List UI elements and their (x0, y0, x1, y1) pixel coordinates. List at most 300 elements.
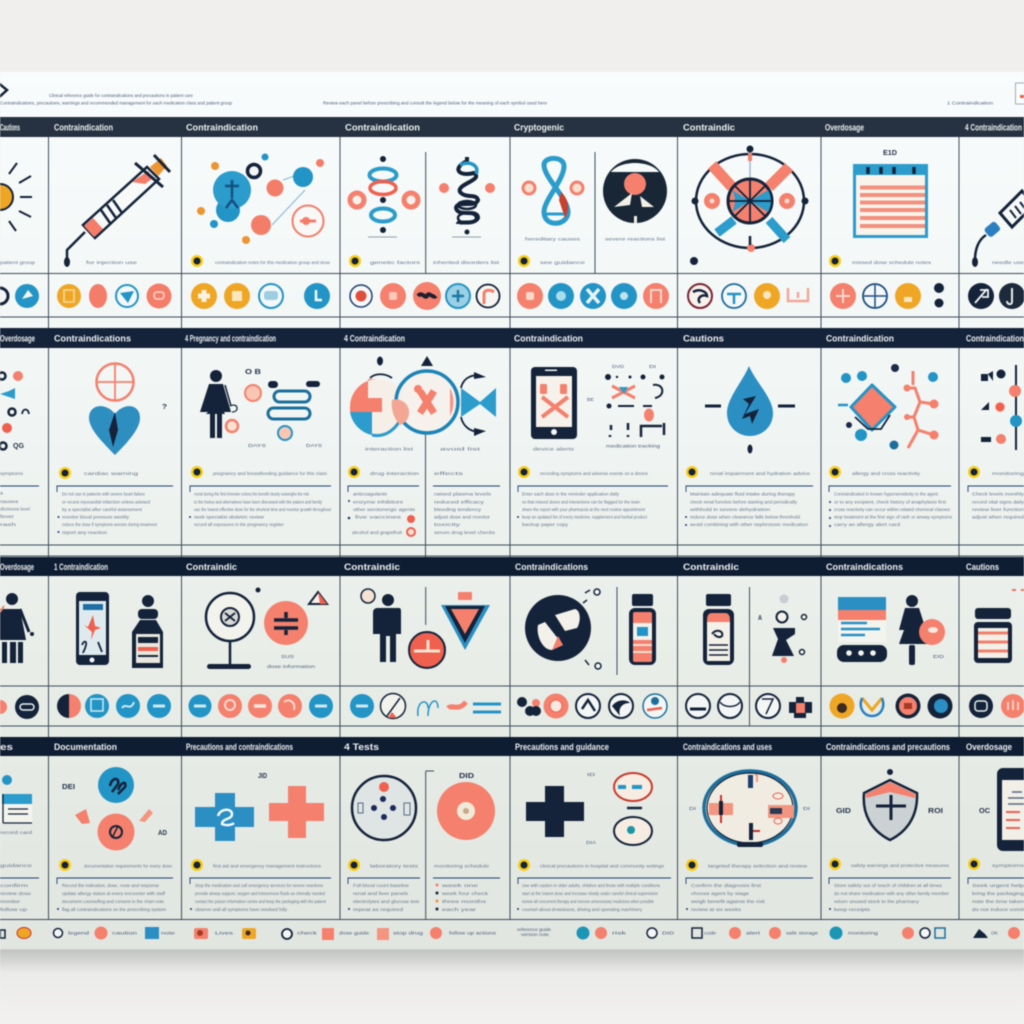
text block: bring the packaging (972, 891, 1024, 896)
icon: contraindication grid: DVD (612, 364, 625, 369)
text block (686, 878, 813, 912)
icon: oval target: DI (689, 806, 696, 811)
icon: tablet: OC (979, 808, 990, 815)
text block left (348, 878, 420, 912)
text block: update allergy status at every encounter with staff (62, 891, 166, 896)
bullet and caption: see guidance (540, 260, 586, 265)
row 4 panel: shield (826, 742, 951, 912)
row 4 panel: shield: Contraindications and precautions (826, 742, 950, 753)
row 3 panel: no pill (515, 562, 667, 718)
icon: bottle and person (132, 595, 163, 668)
text block: keep receipts (834, 907, 871, 912)
icon: navy cross and ovals: DIA (586, 840, 596, 845)
icon: overlapping circles (350, 356, 496, 436)
icon: shield: GID (836, 808, 851, 815)
footer legend: code (704, 930, 717, 936)
icon: ribbon figure (523, 158, 583, 223)
icon row (191, 283, 330, 309)
top header strip (0, 82, 1024, 106)
text block: adjust when required (972, 514, 1024, 520)
icon: chain links: DAYS (248, 443, 266, 448)
icon: medicine bottle (629, 594, 656, 665)
icon: phone (531, 367, 577, 439)
row 1 panel: syringe: for injection use (86, 260, 138, 265)
text block left: Full blood count baseline (353, 883, 410, 888)
text block: or to any excipient, check history of anaphylaxis first (834, 500, 947, 504)
text block: Contraindicated in known hypersensitivity to the agent (834, 492, 939, 496)
text block: cross reactivity can occur within related chemical classes (834, 507, 951, 512)
icon: helix left (350, 156, 418, 237)
row 4 panel: card: record card (0, 830, 33, 835)
text block: keep an updated list of every medicine, supplement and herbal product (522, 514, 648, 520)
top header strip: Contraindications, precautions, warnings and recommended management for each medication class and patient group (0, 100, 232, 106)
text block: a (0, 490, 4, 496)
footer legend: dose guide (339, 930, 370, 936)
row 4 panel: card: guidance (0, 863, 33, 868)
footer legend: caution (112, 930, 138, 936)
row 4 panel: crosses (186, 742, 331, 912)
text block: document counselling and consent in the chart note (62, 899, 164, 904)
bullet and caption (59, 859, 173, 871)
row 4 panel: blue and coral discs (54, 742, 173, 912)
row 3 panel: man and triangle: Contraindic (344, 562, 400, 573)
icon: chain links: O B (245, 369, 261, 376)
icon: molecule cluster (197, 154, 324, 244)
bullet and caption: documentation requirements for every dose (84, 864, 173, 868)
bullet and caption (349, 255, 500, 267)
icon row (830, 283, 944, 309)
row 2 panel: overlap: interaction list (365, 446, 414, 452)
footer legend: check (297, 930, 318, 936)
text block: Do not use in patients with severe heart failure (62, 492, 145, 496)
row 4 panel: card (0, 742, 39, 912)
text block (189, 486, 332, 527)
row 2 panel: phone: device alerts (533, 446, 575, 452)
row 4 panel: dial and disc: 4 Tests (344, 742, 379, 753)
text block: stop treatment at the first sign of rash or airway symptoms (834, 514, 953, 520)
icon: oval target (689, 771, 810, 847)
bullet and caption (518, 466, 649, 478)
row 3 panel: phone and bottle (54, 562, 171, 718)
icon: blue syringe (972, 191, 1024, 267)
text block: fever (0, 514, 15, 519)
row 1 panel: calendar (825, 122, 944, 309)
text block: nausea (0, 499, 19, 504)
footer legend (0, 926, 1020, 940)
icon row (830, 694, 952, 718)
text block right: raised plasma levels (434, 492, 492, 496)
row 1 panel: syringe (54, 122, 172, 308)
icon: label bottle (703, 594, 734, 665)
text block left (348, 486, 419, 536)
text block: so that missed doses and interactions can be flagged for the team (522, 500, 640, 504)
footer legend: reference guide (517, 927, 552, 932)
bullet and caption (518, 859, 665, 871)
row 4 panel: oval target: Contraindications and uses (683, 742, 772, 753)
icon: contraindication grid: BE (587, 397, 594, 402)
icon row (57, 694, 171, 718)
icon: dark disc (603, 159, 667, 224)
footer legend: DID (662, 930, 675, 936)
row 3 panel: ring stand: Contraindic (186, 562, 237, 573)
bullet and caption: laboratory tests (370, 864, 419, 868)
bullet and caption (191, 466, 328, 478)
text block: return unused stock to the pharmacy (834, 899, 920, 904)
row 4 panel: oval target (683, 742, 813, 912)
row 4 panel: tablet: Overdosage (966, 742, 1012, 753)
row 2 panel: phone (514, 334, 668, 527)
text block: Confirm the diagnosis first (691, 883, 762, 888)
text block right (433, 878, 500, 912)
row 1 panel: sun (0, 122, 39, 308)
icon: target and heart (89, 364, 167, 455)
text block: review all concurrent therapy and remove unnecessary medicines when possible (522, 899, 654, 904)
row 1 panel: sun: patient group (0, 260, 36, 265)
footer legend: legend (68, 930, 90, 936)
row 3 panel: bottle and figure: Contraindic (683, 562, 739, 573)
text block right: reduced efficacy (434, 500, 485, 504)
icon: syringe (64, 155, 170, 267)
row 2 panel: markers (0, 334, 39, 527)
row 4 panel: dial and disc (344, 742, 500, 912)
text block (968, 878, 1024, 912)
text block: record vital signs daily (972, 500, 1024, 504)
text block: Enter each dose in the reminder application daily (522, 492, 620, 496)
bullet and caption: genetic factors (370, 260, 421, 265)
bullet and caption: monitoring (992, 471, 1024, 476)
row 3 panel: jar: Cautions (966, 562, 999, 573)
icon: chain links (245, 369, 322, 448)
icon: phone (76, 592, 109, 665)
text block: start at the lowest dose and increase slowly under careful clinical supervision (522, 891, 658, 896)
icon: blue and coral crosses: JID (258, 773, 267, 780)
text block: or recent myocardial infarction unless advised (62, 500, 150, 504)
footer legend: Lives (215, 930, 234, 936)
text block (829, 878, 951, 912)
icon: blue and coral crosses (195, 773, 324, 841)
footer legend: risk (612, 930, 627, 936)
icon: paired discs: DEI (62, 784, 75, 791)
icon: dial (352, 776, 416, 840)
text block left: renal and liver panels (353, 891, 409, 896)
row 2 panel: overlap: avoid list (440, 446, 482, 452)
text block left: repeat as required (353, 907, 404, 912)
text block: check renal function before starting and periodically (690, 500, 798, 504)
icon: prohibited pill (525, 589, 601, 669)
text block: record all exposures in the pregnancy register (194, 522, 284, 527)
icon: coral disc and triangle (409, 592, 490, 668)
icon: helix right (439, 157, 495, 237)
text block right (433, 486, 500, 535)
row 1 panel: figure eight (514, 122, 669, 309)
top header strip: 1 Contraindication (947, 100, 994, 106)
text block (517, 878, 671, 912)
bullet and caption: safety warnings and protective measures (851, 863, 950, 868)
row 1 panel: calendar: Overdosage (825, 122, 864, 134)
footer legend: stop drug (393, 930, 424, 936)
bullet and caption: monitoring schedule (434, 864, 490, 868)
text block: backup paper copy (522, 522, 569, 527)
text block: Maintain adequate fluid intake during therapy (690, 492, 796, 496)
bullet and caption (968, 466, 1024, 478)
row 2 panel: pregnancy: 4 Pregnancy and contraindication (185, 334, 276, 344)
row 1 panel: figure eight: Cryptogenic (514, 122, 564, 134)
bullet and caption: missed dose schedule notes (852, 260, 932, 265)
icon: navy cross and ovals (526, 772, 652, 845)
text block (0, 486, 39, 527)
footer legend: note (161, 930, 176, 936)
row 1 panel: calendar: E1D (883, 150, 897, 157)
icon row (350, 282, 500, 310)
bullet and caption (191, 859, 322, 871)
text block: review dose (0, 891, 32, 896)
icon: scale markers (981, 365, 1022, 450)
footer legend: follow up actions (449, 930, 497, 936)
bullet and caption: targeted therapy selection and review (708, 864, 808, 868)
row 1 panel: wheel (683, 122, 808, 309)
bullet and caption (968, 858, 1024, 870)
bullet and caption (686, 859, 808, 871)
row 2 panel: pregnancy (185, 334, 332, 527)
bullet and caption: drug interaction (370, 471, 420, 476)
row 1 panel: wheel: Contraindic (683, 122, 735, 134)
text block: flag all contraindications on the prescribing system (62, 907, 166, 912)
text block: contact the poison information centre and keep the packaging with the patient (195, 899, 327, 904)
bullet and caption (348, 466, 465, 478)
row 2 panel: water drop (683, 334, 813, 527)
row 3 panel: bottle and figure (683, 562, 812, 718)
row 1 panel: sun: Cautions (0, 122, 20, 134)
row 2 panel: molecule diamond (826, 334, 953, 527)
icon: water drop (705, 366, 795, 454)
footer legend: OK (991, 930, 998, 936)
bullet and caption: contraindication notes for this medication group and dose (215, 260, 330, 265)
row 2 panel: markers: symptoms (0, 471, 24, 476)
row 2 panel: heart (54, 334, 173, 535)
row 1 panel: syringe right: needle use (992, 260, 1024, 265)
text block: rash (0, 522, 17, 527)
row 1 panel: syringe: Contraindication (54, 122, 113, 134)
row 4 panel: blue and coral discs: Documentation (54, 742, 117, 753)
row 3 panel: ring stand (186, 562, 333, 718)
text block left: enzyme inhibitors (353, 500, 404, 504)
text block right: adjust dose and monitor (434, 514, 491, 520)
text block: withhold in severe dehydration (690, 507, 771, 512)
text block: monitor (0, 899, 21, 904)
row 2 panel: heart: Contraindications (54, 334, 131, 344)
footer legend: alert (746, 930, 761, 936)
row 2 panel: molecule diamond: Contraindication (826, 334, 894, 344)
text block: provide airway support, oxygen and intravenous fluids as clinically needed (195, 891, 325, 896)
row 3 panel: no pill: Contraindications (515, 562, 588, 573)
icon: coral division disc: SUS (281, 654, 294, 659)
icon: record card (0, 775, 32, 823)
bullet and caption (59, 467, 139, 479)
top header strip: Review each panel before prescribing and consult the legend below for the meaning of each symbol used here (323, 100, 548, 106)
text block left: other serotonergic agents (353, 507, 416, 512)
icon row (188, 694, 333, 718)
icon: chain links: DAYS (306, 443, 322, 448)
icon: woman with coral disc (899, 595, 945, 665)
text block: report any reaction (62, 530, 108, 535)
text block: choose agent by stage (691, 891, 750, 896)
icon: ring on stand (206, 588, 260, 669)
row 4 panel: tablet (966, 742, 1024, 912)
icon row (517, 694, 667, 718)
bullet and caption: clinical precautions in hospital and community settings (540, 864, 665, 868)
row 1 panel: molecules: Contraindication (186, 122, 258, 134)
text block: follow up (0, 907, 28, 912)
text block (190, 878, 331, 912)
text block: weigh benefit against the risk (691, 899, 766, 904)
text block: counsel about drowsiness, driving and operating machinery (522, 907, 643, 912)
row 2 panel: markers: Overdosage (0, 334, 35, 344)
text block (57, 878, 173, 912)
icon: paired discs: AD (158, 830, 167, 837)
row 3 panel: device and woman (826, 562, 952, 718)
row 4 panel: navy cross (515, 742, 671, 912)
text block: do not induce vomit (972, 907, 1024, 912)
text block: reduce dose when clearance falls below threshold (690, 514, 801, 520)
text block: Avoid during the first trimester unless the benefit clearly outweighs the risk (194, 492, 310, 496)
text block: reduce the dose if symptoms worsen during treatment (62, 522, 158, 527)
text block left: electrolytes and glucose test (353, 899, 420, 904)
bullet and caption: pregnancy and breastfeeding guidance for this class (213, 471, 328, 476)
text block: review at six weeks (691, 907, 742, 912)
icon: coral division disc: dose information (267, 664, 316, 669)
bullet and caption: symptoms (992, 863, 1024, 868)
icon: figure (758, 594, 806, 663)
icon: calendar (853, 164, 928, 238)
icon: marker list (0, 371, 29, 450)
footer legend: monitoring (848, 930, 879, 936)
bullet and caption: allergy and cross reactivity (852, 471, 921, 476)
icon: monitor (837, 597, 887, 662)
text block: seek specialist obstetric review (194, 514, 265, 520)
text block: by a specialist after careful assessment (62, 507, 143, 512)
icon: figure: A (758, 615, 762, 622)
icon: sun (0, 163, 32, 231)
bullet and caption (829, 466, 921, 478)
icon: diamond and molecule (838, 364, 938, 450)
icon: navy cross and ovals: ID (587, 772, 596, 777)
icon: coral disc: DID (459, 773, 474, 780)
row 2 panel: phone: medication tracking (606, 444, 661, 448)
text block (0, 878, 39, 912)
row 1 panel: figure eight: hereditary causes (525, 236, 581, 242)
icon: jar (974, 590, 1024, 663)
row 1 panel: DNA pair (345, 122, 500, 310)
icon row (688, 283, 808, 309)
icon: oval target: DI (803, 806, 810, 811)
text block: dizziness level (0, 506, 30, 512)
row 2 panel: overlap (344, 334, 500, 536)
bullet and caption (686, 466, 811, 478)
footer legend: version note (521, 932, 550, 937)
row 4 panel: navy cross: Precautions and guidance (515, 742, 609, 753)
bullet and caption: inherited disorders list (433, 260, 500, 265)
row 4 panel: card: es (0, 742, 13, 753)
text block: observe until all symptoms have resolved fully (195, 907, 288, 912)
icon: wheel diagram (692, 146, 808, 252)
icon: woman with coral disc: EID (933, 654, 945, 659)
icon: coral disc (437, 773, 495, 840)
icon row (517, 283, 669, 309)
text block right: each year (442, 907, 477, 912)
icon: contraindication grid: DI (649, 364, 656, 369)
bullet and caption: recording symptoms and adverse events on a device (540, 471, 649, 476)
row 1 panel: figure eight: severe reactions list (605, 236, 666, 242)
row 1 panel: DNA pair: Contraindication (345, 122, 420, 134)
text block: Check levels monthly (972, 492, 1024, 496)
text block (685, 486, 813, 527)
text block: avoid combining with other nephrotoxic medication (690, 522, 809, 527)
row 3 panel: woman: Overdosage (0, 562, 34, 573)
row 1 panel: molecules (186, 122, 330, 309)
text block right: week four check (442, 891, 489, 896)
row 4 panel: crosses: Precautions and contraindications (186, 742, 293, 753)
row 2 panel: water drop: Cautions (683, 334, 724, 344)
row 3 panel: device and woman: Contraindications (826, 562, 903, 573)
icon: woman figure (200, 370, 238, 438)
text block (517, 486, 668, 527)
text block: note the time taken (972, 899, 1024, 904)
icon: woman figure (0, 593, 34, 663)
text block right: bleeding tendency (434, 507, 482, 512)
bullet and caption: first aid and emergency management instructions (213, 864, 322, 868)
bullet and caption (518, 255, 586, 267)
row 3 panel: man and triangle (344, 562, 501, 718)
icon row (350, 694, 501, 718)
text block: monitor blood pressure weekly (62, 514, 130, 520)
text block right: toxicity (434, 522, 461, 527)
text block right: three months (442, 899, 487, 904)
icon: tablet (979, 768, 1024, 851)
text block: confirm (0, 883, 28, 888)
row 2 panel: monitor scale (966, 334, 1024, 520)
row 3 panel: phone and bottle: 1 Contraindication (54, 562, 108, 573)
text block right: serum drug level checks (434, 530, 496, 535)
icon: shield (836, 769, 943, 840)
bullet and caption (191, 255, 330, 267)
row 2 panel: overlap: 4 Contraindication (344, 334, 405, 344)
icon: shield: ROI (928, 808, 943, 815)
text block: do not share medication with any other family member (834, 891, 950, 896)
text block: Use with caution in older adults, children and those with multiple conditions (522, 883, 661, 888)
bullet and caption (829, 858, 950, 870)
icon: contraindication grid (587, 364, 664, 437)
row 1 panel: syringe right (965, 122, 1024, 309)
text block: to the foetus and alternatives have been discussed with the patient and family (194, 500, 323, 504)
icon: paired discs (62, 767, 167, 850)
top header strip: Clinical reference guide for contraindications and precautions in patient care (49, 93, 193, 98)
text block right: week one (442, 883, 479, 888)
text block: carry an allergy alert card (834, 522, 901, 527)
icon row (686, 694, 812, 718)
text block: review liver function (972, 507, 1024, 512)
text block: Stop the medication and call emergency services for severe reactions (195, 883, 324, 888)
footer legend: safe storage (786, 930, 819, 936)
text block left: anticoagulants (353, 492, 388, 496)
text block: Record the indication, dose, route and response (62, 883, 160, 888)
icon: man figure (361, 589, 401, 662)
bullet and caption: cardiac warning (84, 471, 139, 476)
bullet and caption (829, 255, 932, 267)
row 3 panel: jar (966, 562, 1024, 718)
text block (57, 486, 173, 535)
icon: marker list: QG (13, 443, 25, 450)
text block: Store safely out of reach of children at all times (834, 883, 943, 888)
